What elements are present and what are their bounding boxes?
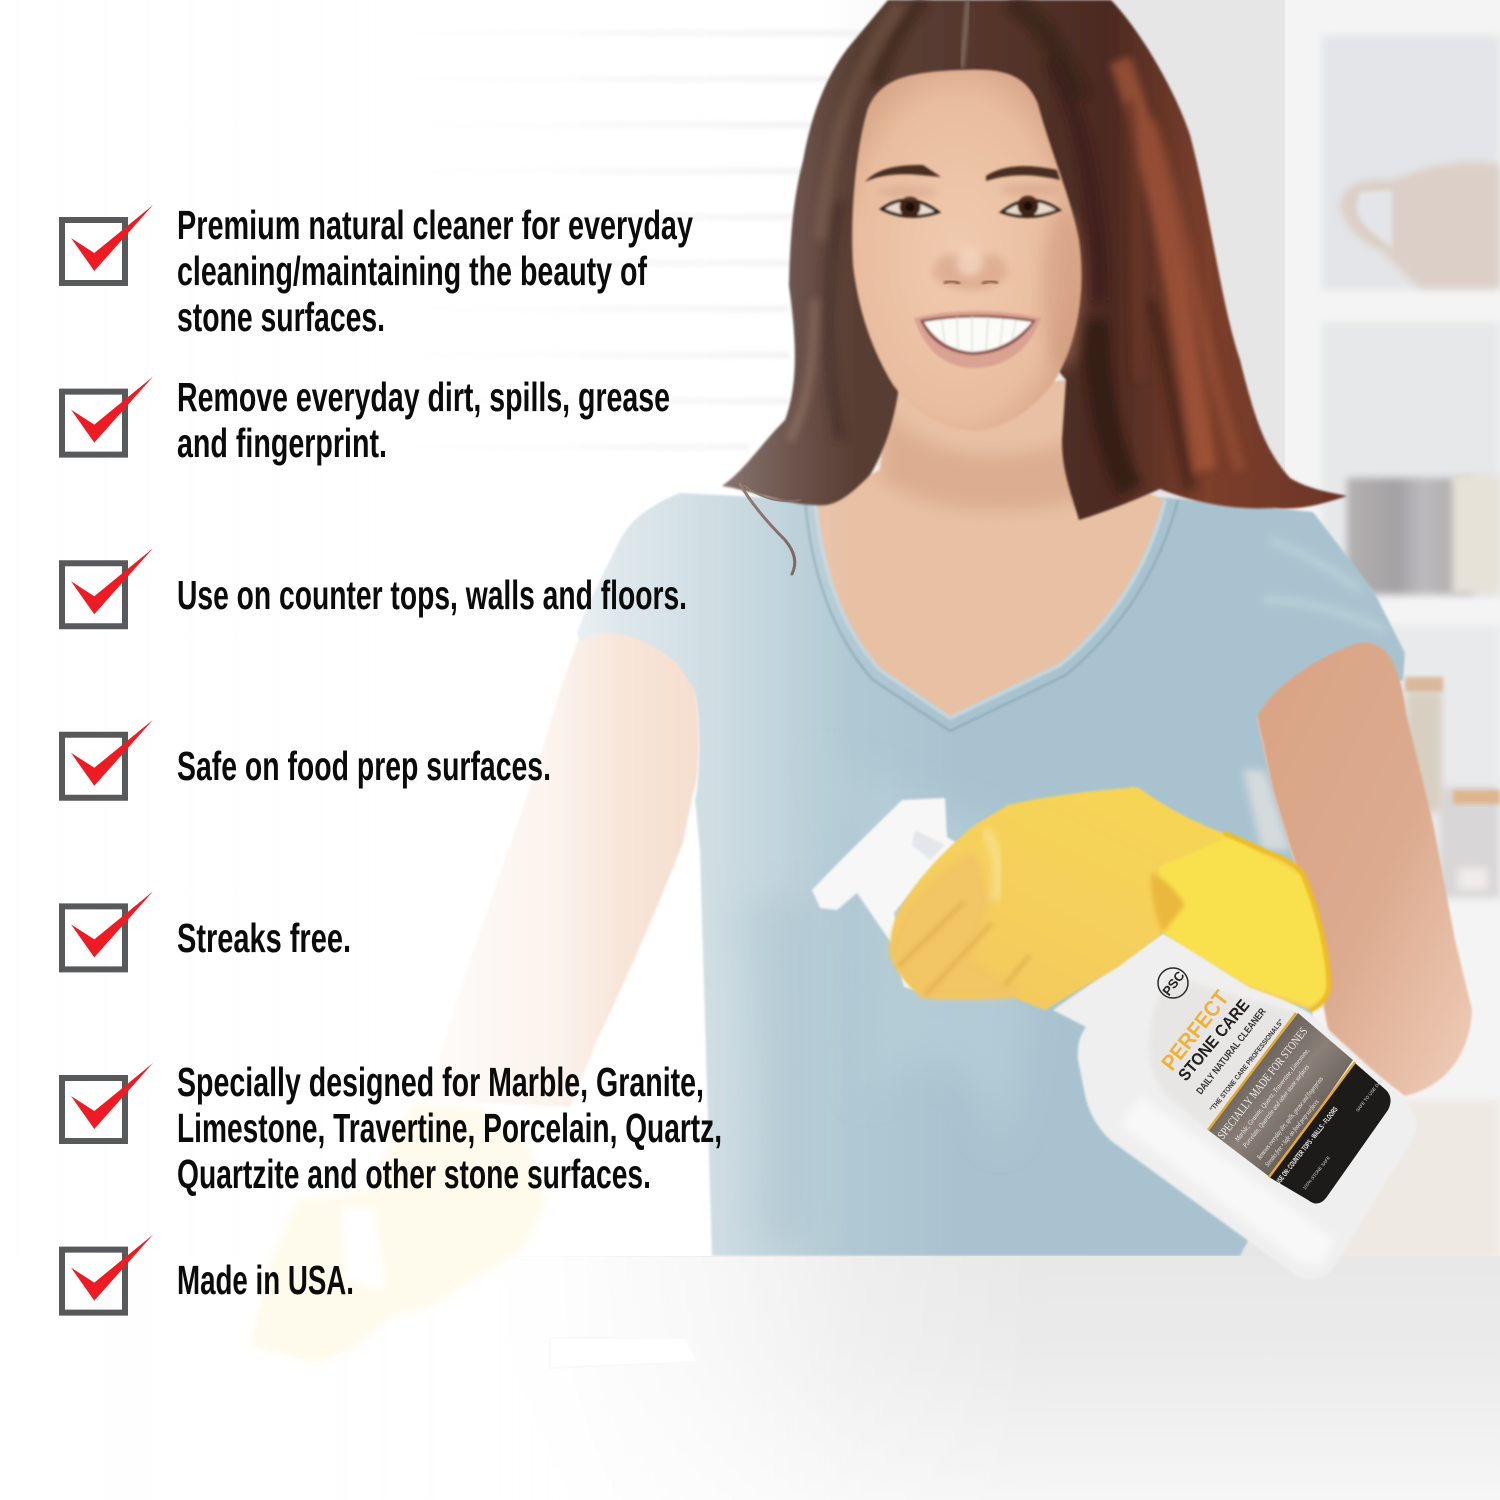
shirt: [577, 493, 1405, 1256]
label text: STONE CARE: [1175, 996, 1253, 1085]
label logo: PSC: [1159, 968, 1188, 998]
label panel: [1148, 968, 1391, 1204]
chest and neck: [815, 380, 1165, 718]
label text: Porcelain, Quartzite and other stone surfaces: [1241, 1063, 1311, 1150]
neckline: [805, 500, 1178, 731]
item: use on counter tops: [59, 548, 687, 629]
icon: checked box: [59, 891, 153, 972]
bottle body: [1053, 933, 1417, 1279]
label text: USE ON: COUNTER TOPS - WALLS - FLOORS: [1273, 1105, 1340, 1186]
text: Streaks free.: [177, 915, 351, 961]
hair wisps: [740, 484, 800, 574]
countertop: [0, 1256, 1500, 1500]
icon: checked box: [59, 377, 153, 458]
hair: [722, 0, 1347, 574]
item: made in USA: [59, 1235, 354, 1316]
icon: checked box: [59, 1235, 153, 1316]
text: Use on counter tops, walls and floors.: [177, 572, 687, 618]
label text: SAFE TO USE DAILY: [1355, 1075, 1386, 1113]
text: Remove everyday dirt, spills, grease: [177, 374, 670, 420]
hair strands: [790, 0, 1240, 490]
eyebrows: [865, 165, 1060, 182]
eye shadow: [878, 184, 1060, 198]
label text: SPECIALLY MADE FOR STONES: [1214, 1024, 1310, 1142]
icon: checked box: [59, 548, 153, 629]
woman: [430, 0, 1472, 1256]
label text: Streaks free • Safe on food prep surfaces: [1263, 1098, 1321, 1168]
nose: [932, 248, 1008, 291]
face: [852, 70, 1081, 431]
item: safe on food prep: [59, 720, 551, 801]
text: Premium natural cleaner for everyday: [177, 202, 693, 248]
blinds: [0, 30, 860, 450]
text: Quartzite and other stone surfaces.: [177, 1151, 651, 1197]
label text: [1156, 985, 1386, 1191]
label text: Removes everyday dirt, spills, grease and fingerprints: [1255, 1075, 1325, 1162]
underarm gap: [1243, 770, 1290, 850]
label text: Marble, Granite, Quartz, Travertine, Limestone,: [1233, 1047, 1311, 1144]
text: stone surfaces.: [177, 294, 385, 340]
mouth: [914, 311, 1041, 368]
arm: left: [430, 633, 699, 1107]
spray bottle in gloved hand: [812, 787, 1417, 1279]
text: [177, 1059, 722, 1197]
cheek shade: [1042, 210, 1082, 370]
shelf objects: jug, glasses, jars: [1340, 162, 1500, 890]
text: [177, 374, 670, 466]
label text: PERFECT: [1156, 985, 1234, 1075]
label text: "THE STONE CARE PROFESSIONALS": [1209, 1018, 1285, 1113]
text: cleaning/maintaining the beauty of: [177, 248, 647, 294]
item: premium natural cleaner: [59, 202, 693, 340]
text: Safe on food prep surfaces.: [177, 743, 551, 789]
item: remove everyday dirt: [59, 374, 670, 466]
text: and fingerprint.: [177, 420, 387, 466]
arm: right: [1257, 643, 1472, 1096]
faded glove on the counter: [250, 1103, 547, 1363]
icon: checked box: [59, 720, 153, 801]
sleeve highlights: [1262, 540, 1385, 630]
counter fade: [0, 1257, 1060, 1500]
item: streaks free: [59, 891, 351, 972]
eyes: [882, 196, 1059, 218]
label text: DAILY NATURAL CLEANER: [1195, 1006, 1269, 1097]
spray head: [812, 798, 957, 990]
text: [177, 202, 693, 340]
hair parting: [962, 0, 968, 68]
checklist: [59, 202, 722, 1316]
text: Specially designed for Marble, Granite,: [177, 1059, 704, 1105]
icon: checked box: [59, 1063, 153, 1144]
item: specially designed: [59, 1059, 722, 1197]
yellow rubber glove: [890, 787, 1329, 1010]
text: Made in USA.: [177, 1257, 354, 1303]
icon: checked box: [59, 205, 153, 286]
text: Limestone, Travertine, Porcelain, Quartz,: [177, 1105, 722, 1151]
faded cloth on the counter: [550, 1338, 698, 1368]
label text: 100% STONE SAFE: [1302, 1155, 1331, 1191]
